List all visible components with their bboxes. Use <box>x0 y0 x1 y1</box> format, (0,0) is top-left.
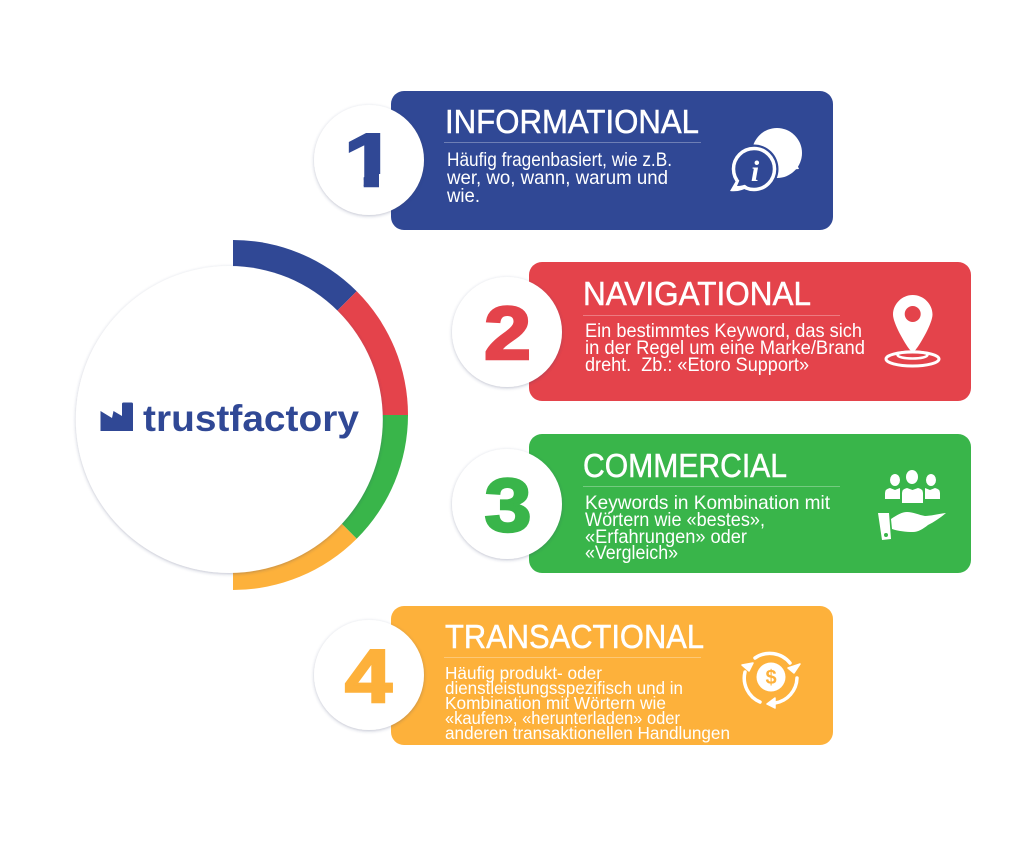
heading: COMMERCIAL <box>583 447 787 484</box>
description: «kaufen», «herunterladen» oder <box>445 708 680 728</box>
icon: dollar cycle: $ <box>765 667 777 689</box>
number badge 2 <box>452 277 562 387</box>
ring segment: orange <box>233 415 357 590</box>
number badge 1: 1 <box>344 118 396 202</box>
icon: info speech bubbles <box>730 128 802 194</box>
ring segment: red <box>233 291 408 415</box>
number badge 4 <box>314 620 424 730</box>
description: Häufig produkt- oder <box>445 663 602 683</box>
central ring and logo <box>76 240 408 590</box>
description: «Vergleich» <box>585 542 678 564</box>
description: Keywords in Kombination mit <box>585 492 831 514</box>
panel: commercial <box>452 434 971 573</box>
number badge 3: 3 <box>484 463 532 547</box>
card background <box>391 606 833 745</box>
icon: people over hand <box>878 470 946 540</box>
number badge 4: 4 <box>345 634 392 718</box>
number badge 2: 2 <box>484 291 531 375</box>
heading: INFORMATIONAL <box>445 103 699 140</box>
description: dienstleistungsspezifisch und in <box>445 678 683 698</box>
logo wordmark: trustfactory <box>143 398 359 439</box>
description: Wörtern wie «bestes», <box>585 509 765 531</box>
card background <box>529 434 971 573</box>
card background <box>529 262 971 401</box>
description: Häufig fragenbasiert, wie z.B. <box>447 149 672 171</box>
description: «Erfahrungen» oder <box>585 526 747 548</box>
ring segment: green <box>233 415 408 539</box>
number badge 3 <box>452 449 562 559</box>
white centre circle <box>76 266 383 573</box>
description: Ein bestimmtes Keyword, das sich <box>585 320 862 342</box>
description <box>585 492 831 564</box>
panel: navigational <box>452 262 971 401</box>
number badge 1 <box>314 105 424 215</box>
description <box>446 149 672 207</box>
ring segment: blue <box>233 240 357 415</box>
panel: transactional <box>314 606 833 745</box>
heading: TRANSACTIONAL <box>445 618 704 655</box>
description <box>445 663 730 743</box>
icon: info speech bubbles: i <box>751 155 760 188</box>
description: anderen transaktionellen Handlungen <box>445 723 730 743</box>
panel: informational <box>314 91 833 230</box>
description: dreht. Zb.: «Etoro Support» <box>585 354 809 376</box>
description <box>585 320 865 376</box>
logo icon: factory <box>100 402 133 431</box>
description: wer, wo, wann, warum und <box>446 167 668 189</box>
description: Kombination mit Wörtern wie <box>445 693 666 713</box>
heading: NAVIGATIONAL <box>583 275 811 312</box>
description: in der Regel um eine Marke/Brand <box>585 337 865 359</box>
description: wie. <box>446 185 480 207</box>
icon: location pin <box>886 295 939 366</box>
card background <box>391 91 833 230</box>
icon: dollar cycle <box>742 653 800 708</box>
